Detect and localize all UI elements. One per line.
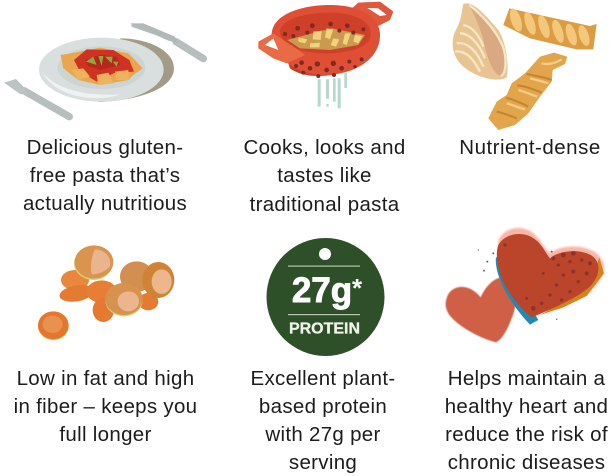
caption: low in fat: full longer (59, 423, 152, 446)
caption: excellent protein: with 27g per (264, 423, 381, 446)
caption: excellent protein: based protein (259, 395, 387, 418)
icon: plate of pasta with knife and fork (4, 23, 203, 117)
protein label: PROTEIN (289, 320, 360, 338)
caption: healthy heart: Helps maintain a (448, 367, 606, 390)
caption: excellent protein: Excellent plant- (251, 367, 395, 390)
icon: 27g protein badge (266, 238, 384, 356)
icon: two hearts (446, 228, 604, 342)
caption: delicious gluten-free pasta: free pasta that’s (30, 164, 180, 187)
caption: cooks, looks and tastes: Cooks, looks and (243, 136, 406, 159)
caption: delicious gluten-free pasta: actually nutritious (23, 192, 187, 215)
icon: sliced vegetables (38, 245, 174, 340)
asterisk: * (352, 273, 363, 303)
caption: nutrient-dense: Nutrient-dense (459, 136, 601, 159)
27g value: 27g (292, 271, 352, 310)
caption: delicious gluten-free pasta: Delicious gluten- (27, 136, 183, 159)
caption: low in fat: in fiber – keeps you (14, 395, 197, 418)
caption: excellent protein: serving (289, 451, 357, 474)
caption: cooks, looks and tastes: traditional pasta (250, 193, 400, 216)
leaf mark (319, 248, 331, 260)
caption: healthy heart: chronic diseases (448, 451, 605, 474)
caption: healthy heart: healthy heart and (445, 395, 608, 418)
icon: three pasta shapes (453, 3, 597, 130)
caption: cooks, looks and tastes: tastes like (277, 164, 372, 187)
caption: healthy heart: reduce the risk of (445, 423, 608, 446)
caption: low in fat: Low in fat and high (17, 367, 194, 390)
icon: red colander with pasta (258, 2, 393, 108)
